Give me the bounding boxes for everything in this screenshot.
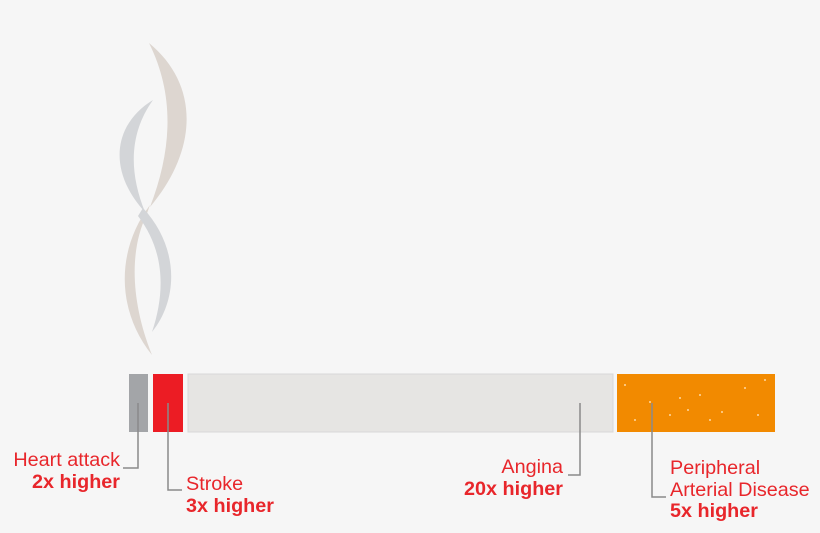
- label: peripheral arterial disease: [670, 457, 810, 522]
- label: stroke: Stroke: [186, 473, 243, 495]
- label: stroke: 3x higher: [186, 495, 274, 517]
- cigarette: [129, 374, 775, 432]
- label: peripheral arterial disease: 5x higher: [670, 500, 758, 522]
- leader lines: [123, 403, 666, 497]
- label: stroke: [186, 473, 274, 517]
- label: angina: [464, 456, 563, 500]
- label: peripheral arterial disease: Peripheral: [670, 457, 760, 479]
- icon: smoke: [120, 43, 187, 355]
- label: heart attack: Heart attack: [13, 449, 120, 471]
- label: heart attack: 2x higher: [32, 471, 120, 493]
- label: angina: 20x higher: [464, 478, 563, 500]
- label: peripheral arterial disease: Arterial Disease: [670, 478, 810, 500]
- label: heart attack: [13, 449, 120, 493]
- label: angina: Angina: [501, 456, 563, 478]
